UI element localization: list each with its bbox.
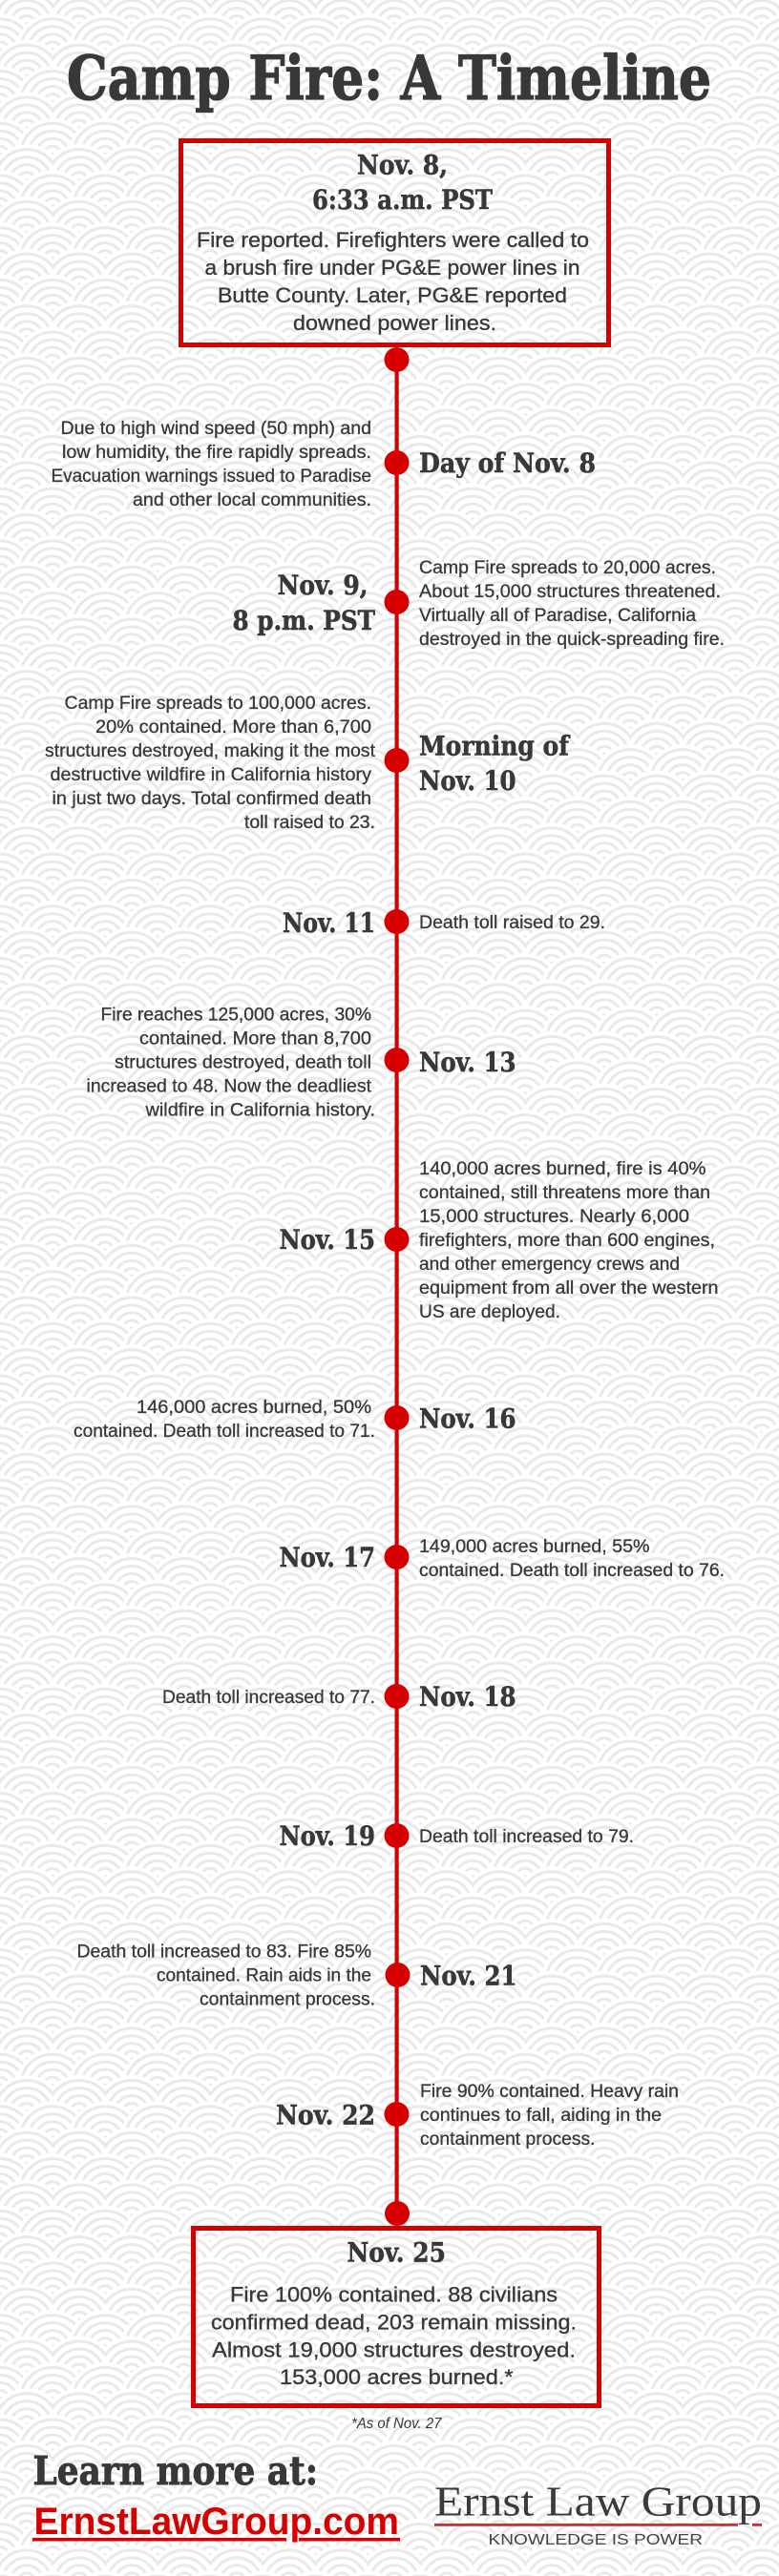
- date: Nov. 21: [420, 1960, 517, 1992]
- text: [45, 694, 376, 833]
- date: Day of Nov. 8: [419, 447, 596, 479]
- text: 146,000 acres burned, 50%: [137, 1398, 371, 1418]
- text: containment process.: [200, 1990, 375, 2009]
- text: high wind: Due to high wind speed (50 mph) and: [61, 419, 371, 439]
- text: Death toll increased to 77.: [162, 1688, 375, 1708]
- text: final totals: confirmed dead, 203 remain missing.: [211, 2311, 577, 2334]
- date: Nov. 13: [419, 1047, 516, 1078]
- text: increased to 48. Now the deadliest: [86, 1076, 372, 1097]
- text: fire reported: Butte County. Later, PG&E reported: [218, 283, 567, 307]
- event: Nov. 16: [74, 1398, 516, 1442]
- marker: [384, 1227, 409, 1252]
- text: [419, 558, 725, 650]
- date: Nov. 17: [279, 1542, 375, 1573]
- marker: [386, 1963, 411, 1987]
- text: wildfire in California history.: [144, 1101, 375, 1120]
- event: Day of Nov. 8: [52, 419, 596, 510]
- event: Nov. 21: [76, 1942, 517, 2009]
- text: 149,000 acres burned, 55%: [419, 1537, 650, 1557]
- link: ErnstLawGroup.com: [34, 2501, 399, 2543]
- event: Nov. 9: [233, 558, 725, 650]
- date: Nov. 16: [419, 1402, 516, 1435]
- call to action: learn more: [32, 2448, 400, 2543]
- logo: Ernst Law Group: Ernst Law Group: [434, 2479, 762, 2524]
- marker: [384, 1405, 409, 1430]
- marker: top: [384, 347, 409, 372]
- text: 140,000 acres burned, fire is 40%: [419, 1159, 706, 1179]
- text: contained. More than 8,700: [139, 1028, 371, 1049]
- marker: [384, 1545, 409, 1569]
- panel: first report Nov. 8: [181, 141, 609, 345]
- text: [76, 1942, 375, 2009]
- footnote: *As of Nov. 27: [351, 2416, 443, 2432]
- text: 15,000 structures. Nearly 6,000: [419, 1207, 689, 1227]
- text: Virtually all of Paradise, California: [419, 606, 696, 626]
- event: Nov. 19: [279, 1820, 634, 1852]
- date: Nov. 9,: [277, 570, 368, 601]
- text: About 15,000 structures threatened.: [419, 582, 721, 602]
- text: destructive wildfire in California history: [50, 765, 372, 785]
- date: 8 p.m. PST: [233, 605, 375, 636]
- date: [233, 570, 375, 636]
- text: final totals: Fire 100% contained. 88 civilians: [230, 2282, 558, 2307]
- marker: [384, 450, 409, 475]
- text: Camp Fire spreads to 100,000 acres.: [65, 694, 371, 714]
- marker: [384, 909, 409, 934]
- event: Nov. 15: [279, 1159, 718, 1322]
- date: Nov. 19: [279, 1820, 375, 1852]
- text: Death toll raised to 29.: [419, 913, 605, 933]
- date: Nov. 10: [419, 765, 516, 797]
- text: final totals: Almost 19,000 structures destroyed.: [212, 2337, 576, 2362]
- text: [86, 1006, 375, 1120]
- text: toll raised to 23.: [244, 813, 375, 833]
- text: structures destroyed, death toll: [115, 1053, 371, 1072]
- text: contained. Rain aids in the: [157, 1965, 371, 1986]
- date: Nov. 18: [419, 1681, 516, 1713]
- event: Nov. 17: [279, 1537, 725, 1581]
- text: fire reported: Fire reported. Firefighters were called to: [197, 228, 589, 252]
- text: equipment from all over the western: [419, 1278, 718, 1298]
- text: Camp Fire spreads to 20,000 acres.: [419, 558, 716, 578]
- marker: [384, 2102, 409, 2127]
- marker: [384, 1823, 409, 1848]
- heading: Learn more at:: [32, 2448, 318, 2494]
- text: fire reported: [197, 228, 589, 335]
- text: final totals: [211, 2282, 577, 2389]
- date: [419, 731, 571, 797]
- text: [419, 1537, 725, 1581]
- text: in just two days. Total confirmed death: [52, 789, 371, 809]
- event: Nov. 13: [86, 1006, 516, 1120]
- event: Nov. 18: [162, 1681, 516, 1713]
- date: Morning of: [419, 731, 571, 761]
- date: Nov. 15: [279, 1224, 375, 1256]
- text: firefighters, more than 600 engines,: [419, 1231, 715, 1251]
- text: Death toll increased to 79.: [419, 1827, 634, 1847]
- event: Nov. 11: [283, 907, 605, 939]
- logo: Ernst Law Group: KNOWLEDGE IS POWER: [489, 2532, 703, 2548]
- text: contained, still threatens more than: [419, 1183, 710, 1203]
- logo: Ernst Law Group: [434, 2479, 762, 2548]
- panel: Nov. 25 final: [193, 2229, 600, 2406]
- marker: [384, 590, 409, 614]
- marker: [384, 1684, 409, 1709]
- text: final totals: 153,000 acres burned.*: [280, 2365, 514, 2389]
- marker: [384, 748, 409, 773]
- timeline line: [395, 360, 399, 2213]
- text: [419, 1159, 718, 1322]
- text: high wind: low humidity, the fire rapidly spreads.: [62, 443, 371, 463]
- date: Nov. 11: [283, 907, 375, 939]
- date: Nov. 8, 6:33 a.m. PST: 6:33 a.m. PST: [312, 184, 493, 216]
- text: high wind: and other local communities.: [133, 490, 371, 510]
- text: contained. Death toll increased to 71.: [74, 1422, 375, 1442]
- text: destroyed in the quick-spreading fire.: [419, 630, 725, 650]
- text: 20% contained. More than 6,700: [95, 717, 371, 737]
- text: [420, 2082, 679, 2150]
- text: Fire reaches 125,000 acres, 30%: [101, 1006, 371, 1025]
- text: containment process.: [420, 2129, 596, 2150]
- text: and other emergency crews and: [419, 1255, 680, 1275]
- text: Fire 90% contained. Heavy rain: [420, 2082, 679, 2102]
- event: Morning of Nov. 10: [45, 694, 571, 833]
- marker: bottom: [385, 2201, 410, 2226]
- text: contained. Death toll increased to 76.: [419, 1561, 725, 1581]
- text: fire reported: a brush fire under PG&E power lines in: [204, 256, 580, 280]
- text: structures destroyed, making it the most: [45, 741, 376, 761]
- date: Nov. 8, 6:33 a.m. PST: Nov. 8,: [357, 149, 448, 181]
- text: continues to fall, aiding in the: [420, 2106, 662, 2126]
- date: Nov. 25: [347, 2236, 446, 2269]
- marker: [384, 1048, 409, 1072]
- text: Death toll increased to 83. Fire 85%: [76, 1942, 371, 1962]
- text: [74, 1398, 375, 1442]
- text: fire reported: downed power lines.: [293, 311, 496, 335]
- text: high wind: Evacuation warnings issued to Paradise: [52, 467, 371, 487]
- event: Nov. 22: [276, 2082, 679, 2150]
- date: Nov. 22: [276, 2099, 375, 2131]
- text: high wind: [52, 419, 371, 510]
- text: US are deployed.: [419, 1302, 560, 1322]
- date: Nov. 8, 6:33 a.m. PST: [312, 149, 493, 216]
